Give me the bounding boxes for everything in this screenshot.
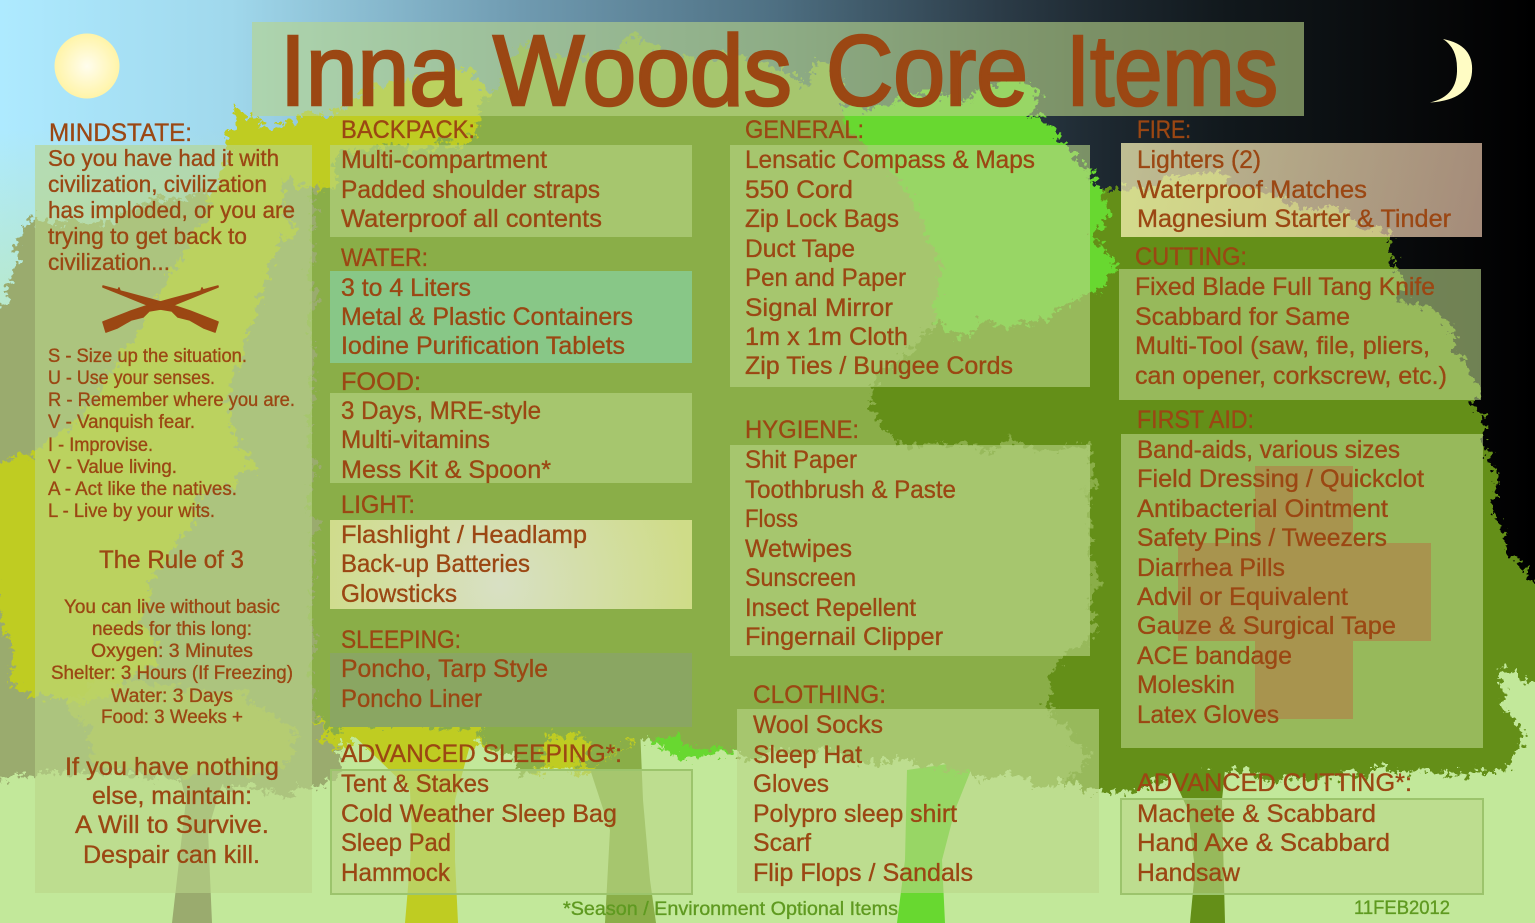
panel: general: Lensatic Compass & Maps <box>745 146 1035 174</box>
panel: advanced cutting: Hand Axe & Scabbard <box>1137 829 1390 857</box>
panel: backpack: BACKPACK: <box>341 116 475 144</box>
intro paragraph: has imploded, or you are <box>48 197 295 223</box>
panel: first aid: Diarrhea Pills <box>1137 554 1285 582</box>
panel: sleeping: Poncho Liner <box>341 685 482 713</box>
panel: first aid: Gauze & Surgical Tape <box>1137 612 1396 640</box>
panel: hygiene: Sunscreen <box>745 564 856 592</box>
panel: fire: Waterproof Matches <box>1137 176 1367 204</box>
survival acronym list: V - Vanquish fear. <box>48 411 195 433</box>
panel: advanced cutting: Machete & Scabbard <box>1137 800 1376 828</box>
panel: first aid: ACE bandage <box>1137 642 1292 670</box>
panel: general: Zip Lock Bags <box>745 205 899 233</box>
tree trunks <box>172 727 1225 923</box>
panel: general: 1m x 1m Cloth <box>745 323 908 351</box>
rule of 3 list: Food: 3 Weeks + <box>101 706 243 728</box>
panel: cutting: can opener, corkscrew, etc.) <box>1135 362 1447 390</box>
panel: backpack: Waterproof all contents <box>341 205 602 233</box>
panel: first aid <box>1121 406 1483 748</box>
panel: hygiene <box>730 416 1090 656</box>
title: Inna <box>280 15 461 127</box>
panel: general: Signal Mirror <box>745 294 893 322</box>
panel: backpack: Multi-compartment <box>341 146 547 174</box>
panel: first aid: Safety Pins / Tweezers <box>1137 524 1387 552</box>
panel: cutting: Fixed Blade Full Tang Knife <box>1135 273 1435 301</box>
panel: water <box>330 244 692 363</box>
panel: clothing: Scarf <box>753 829 811 857</box>
panel: general: 550 Cord <box>745 176 853 204</box>
panel: cutting: Multi-Tool (saw, file, pliers, <box>1135 332 1430 360</box>
panel: backpack: Padded shoulder straps <box>341 176 600 204</box>
footnote: *Season / Environment Optional Items <box>563 898 898 920</box>
panel: clothing: CLOTHING: <box>753 681 886 709</box>
intro paragraph: trying to get back to <box>48 223 247 249</box>
panel: first aid: Antibacterial Ointment <box>1137 495 1388 523</box>
panel: advanced sleeping: ADVANCED SLEEPING*: <box>341 740 622 768</box>
intro paragraph: civilization... <box>48 249 170 275</box>
panel: clothing: Wool Socks <box>753 711 883 739</box>
panel: advanced sleeping: Cold Weather Sleep Bag <box>341 800 617 828</box>
panel: light <box>330 491 692 609</box>
panel: hygiene: Shit Paper <box>745 446 857 474</box>
panel: clothing: Gloves <box>753 770 829 798</box>
panel: cutting: CUTTING: <box>1135 243 1247 271</box>
panel: water: Metal & Plastic Containers <box>341 303 633 331</box>
panel: general: Duct Tape <box>745 235 855 263</box>
panel: light: Back-up Batteries <box>341 550 530 578</box>
panel: advanced cutting <box>1121 769 1483 894</box>
survival acronym list: I - Improvise. <box>48 434 153 456</box>
survival acronym list <box>48 345 295 522</box>
closing message: If you have nothing <box>65 753 279 781</box>
panel: first aid: FIRST AID: <box>1137 406 1254 434</box>
heading: mindstate: MINDSTATE: <box>49 119 192 147</box>
icon: crossed rifles <box>103 286 218 332</box>
crescent moon <box>1430 39 1472 102</box>
panel: backpack <box>330 116 692 237</box>
survival acronym list: A - Act like the natives. <box>48 478 237 500</box>
sun <box>54 34 120 98</box>
title <box>252 15 1304 127</box>
panel: first aid: Field Dressing / Quickclot <box>1137 465 1424 493</box>
rule of 3 list: Oxygen: 3 Minutes <box>91 640 253 662</box>
panel: light: LIGHT: <box>341 491 415 519</box>
rule of 3 list: You can live without basic <box>64 596 280 618</box>
intro paragraph <box>48 145 295 275</box>
panel: light: Glowsticks <box>341 580 457 608</box>
rule of 3 list: needs for this long: <box>92 618 252 640</box>
panel: sleeping <box>330 626 692 727</box>
panel: water: 3 to 4 Liters <box>341 274 471 302</box>
panel: cutting <box>1119 243 1481 400</box>
survival acronym list: V - Value living. <box>48 456 177 478</box>
closing message: A Will to Survive. <box>75 811 269 839</box>
panel: first aid: Latex Gloves <box>1137 701 1279 729</box>
panel: fire: Magnesium Starter & Tinder <box>1137 205 1451 233</box>
panel: sleeping: Poncho, Tarp Style <box>341 655 548 683</box>
closing message <box>65 753 279 869</box>
panel: first aid: Moleskin <box>1137 671 1235 699</box>
panel: hygiene: Wetwipes <box>745 535 852 563</box>
panel: cutting: Scabbard for Same <box>1135 303 1350 331</box>
panel: food <box>330 368 692 484</box>
panel: water: WATER: <box>341 244 428 272</box>
panel: fire: FIRE: <box>1137 116 1191 144</box>
panel: sleeping: SLEEPING: <box>341 626 461 654</box>
panel: mindstate <box>35 119 312 893</box>
panel: advanced sleeping <box>331 740 692 894</box>
panel: first aid: Band-aids, various sizes <box>1137 436 1400 464</box>
panel: hygiene: Floss <box>745 505 798 533</box>
panel: hygiene: Insect Repellent <box>745 594 916 622</box>
panel: light: Flashlight / Headlamp <box>341 521 587 549</box>
panel: fire <box>1121 116 1482 237</box>
intro paragraph: So you have had it with <box>48 145 279 171</box>
survival acronym list: S - Size up the situation. <box>48 345 247 367</box>
closing message: else, maintain: <box>92 782 252 810</box>
panel: general: GENERAL: <box>745 116 864 144</box>
panel: advanced cutting: Handsaw <box>1137 859 1241 887</box>
title: Woods <box>493 15 792 127</box>
panel: fire: Lighters (2) <box>1137 146 1261 174</box>
survival acronym list: R - Remember where you are. <box>48 389 295 411</box>
panel: clothing: Sleep Hat <box>753 741 862 769</box>
panel: general <box>730 116 1090 387</box>
panel: food: 3 Days, MRE-style <box>341 397 541 425</box>
panel: clothing: Polypro sleep shirt <box>753 800 957 828</box>
panel: food: FOOD: <box>341 368 421 396</box>
title: Items <box>1066 15 1278 127</box>
survival acronym list: L - Live by your wits. <box>48 500 215 522</box>
icon: first aid cross <box>1178 466 1431 719</box>
rule of 3 list <box>51 596 293 728</box>
closing message: Despair can kill. <box>83 841 260 869</box>
rule of 3 list: Shelter: 3 Hours (If Freezing) <box>51 662 293 684</box>
panel: general: Pen and Paper <box>745 264 906 292</box>
rule of 3 heading: The Rule of 3 <box>99 546 244 574</box>
panel: hygiene: Fingernail Clipper <box>745 623 943 651</box>
date: 11FEB2012 <box>1354 897 1450 919</box>
panel: hygiene: Toothbrush & Paste <box>745 476 956 504</box>
panel: advanced sleeping: Tent & Stakes <box>341 770 489 798</box>
panel: clothing: Flip Flops / Sandals <box>753 859 973 887</box>
panel: advanced sleeping: Sleep Pad <box>341 829 451 857</box>
panel: hygiene: HYGIENE: <box>745 416 859 444</box>
panel: advanced cutting: ADVANCED CUTTING*: <box>1137 769 1412 797</box>
survival acronym list: U - Use your senses. <box>48 367 215 389</box>
panel: general: Zip Ties / Bungee Cords <box>745 352 1013 380</box>
panel: first aid: Advil or Equivalent <box>1137 583 1348 611</box>
title: Core <box>826 15 1028 127</box>
panel: food: Mess Kit & Spoon* <box>341 456 551 484</box>
intro paragraph: civilization, civilization <box>48 171 267 197</box>
rule of 3 list: Water: 3 Days <box>111 685 233 707</box>
panel: water: Iodine Purification Tablets <box>341 332 625 360</box>
panel: advanced sleeping: Hammock <box>341 859 450 887</box>
panel: clothing <box>737 681 1099 893</box>
panel: food: Multi-vitamins <box>341 426 490 454</box>
